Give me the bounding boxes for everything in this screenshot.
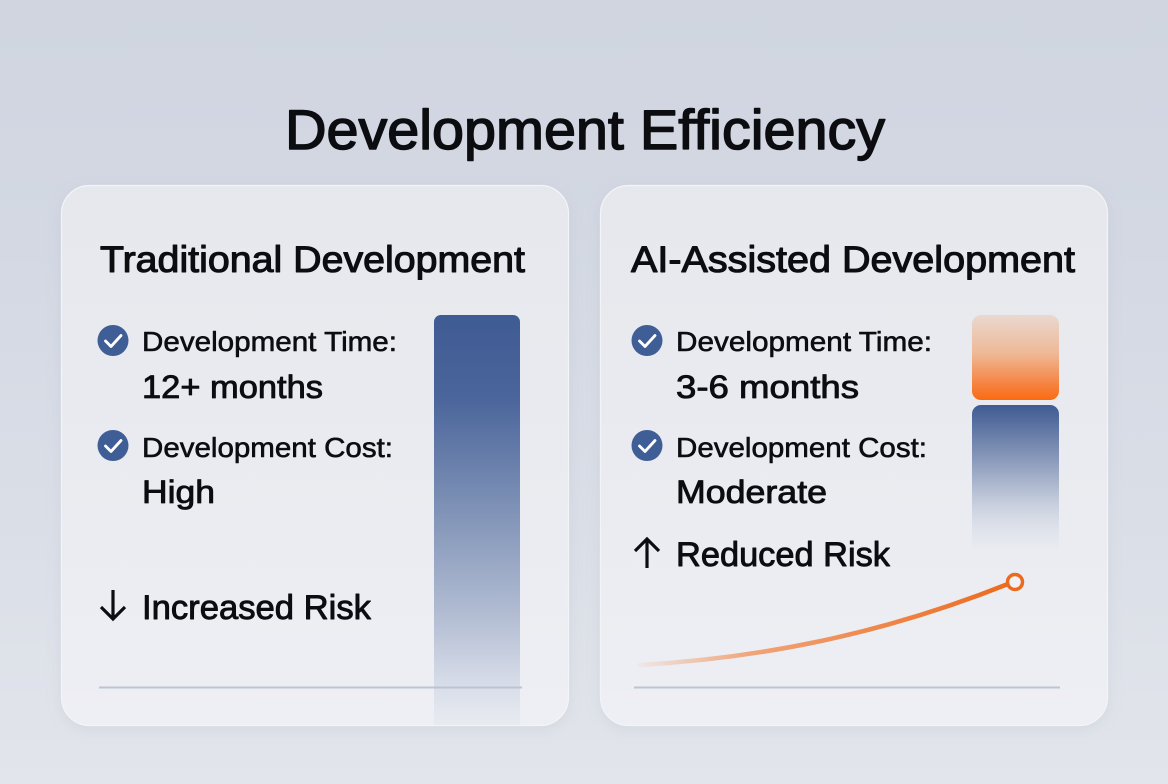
panel: ai-assisted development	[600, 186, 1108, 726]
trend line	[640, 574, 1022, 665]
panel background	[600, 186, 1108, 726]
bar: blue segment	[972, 405, 1059, 552]
label: reduced risk: Reduced Risk	[676, 536, 891, 574]
heading: traditional development: Traditional Development	[100, 239, 526, 280]
value: 3-6 months: 3-6 months	[676, 369, 859, 405]
label: development time: Development Time:	[142, 326, 397, 357]
bar: orange segment	[972, 315, 1059, 400]
icon: check cost	[98, 430, 128, 461]
value: 12+ months: 12+ months	[142, 369, 323, 405]
heading: ai-assisted development: AI-Assisted Development	[631, 239, 1076, 280]
axis line	[634, 686, 1060, 688]
icon: check time	[632, 325, 662, 356]
label: development cost: Development Cost:	[142, 432, 393, 463]
icon: check cost	[632, 430, 662, 461]
label: development time: Development Time:	[676, 326, 932, 357]
panel: traditional development	[62, 186, 568, 726]
title: Development Efficiency	[285, 98, 885, 161]
axis line	[99, 686, 522, 688]
label: increased risk: Increased Risk	[142, 589, 372, 627]
icon: up arrow	[635, 539, 659, 568]
icon: check time	[98, 325, 128, 356]
value: moderate: Moderate	[676, 474, 827, 510]
value: high: High	[142, 474, 215, 510]
label: development cost: Development Cost:	[676, 432, 927, 463]
icon: down arrow	[101, 590, 125, 619]
panel background	[62, 186, 568, 726]
bar: traditional	[434, 315, 520, 725]
